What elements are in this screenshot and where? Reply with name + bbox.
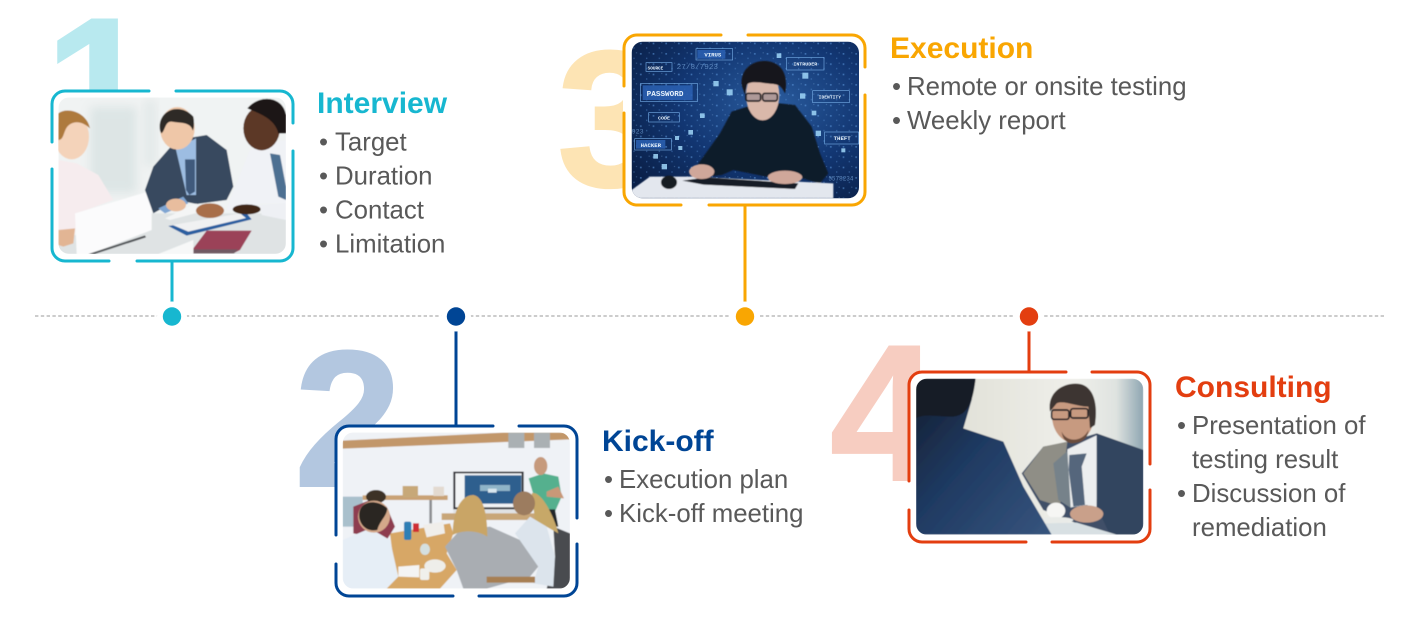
list: consulting: • [1177,412,1186,440]
photo: hacker at keyboard: IDENTITY [819,95,841,101]
photo: hacker at keyboard: VIRUS [704,52,722,59]
heading: kick-off: Kick-off [602,425,715,458]
list: consulting: • [1177,480,1186,508]
label: execution [890,32,1187,135]
step 4: consulting [830,302,1366,543]
list: interview: Duration [335,162,433,190]
list: interview: • [319,230,328,258]
heading: consulting: Consulting [1175,371,1332,404]
label: kick-off [602,425,803,528]
list: consulting: remediation [1192,514,1327,542]
label: interview [317,87,448,258]
step 2: kick-off [294,302,803,597]
photo: hacker at keyboard [632,42,859,198]
numeral 4: 4 [830,305,938,522]
photo: hacker at keyboard: PASSWORD [647,91,684,99]
list: consulting: testing result [1192,446,1338,474]
photo: hacker at keyboard: 27/8/7923 [677,64,718,72]
timeline axis [35,315,1385,317]
frame 1 [51,90,294,262]
photo: kick-off meeting room [343,432,570,589]
list: kick-off: Execution plan [619,466,788,494]
list: kick-off: Kick-off meeting [619,500,803,528]
timeline dot 2 [441,302,471,332]
frame 4 [908,371,1151,543]
photo: hacker at keyboard: THEFT [834,135,851,142]
heading: execution: Execution [890,32,1033,65]
list: interview: • [319,162,328,190]
timeline dot 4 [1014,302,1044,332]
list: execution: • [892,107,901,135]
label: consulting [1175,371,1366,542]
list: interview: Contact [335,196,424,224]
numeral 2: 2 [294,311,402,528]
photo: hacker at keyboard: 923 [632,127,644,135]
timeline dot 3 [730,302,760,332]
photo: consultant in discussion [916,379,1143,535]
step 1: interview [45,0,448,332]
connector 3 [744,205,746,303]
photo: hacker at keyboard: INTRUDER [793,62,817,68]
connector 4 [1028,330,1030,371]
list: execution: Weekly report [907,107,1066,135]
list: interview: Limitation [335,230,445,258]
timeline dot 1 [157,302,187,332]
list: consulting: Presentation of [1192,412,1366,440]
frame 2 [335,425,578,597]
list: interview: • [319,128,328,156]
list: execution: • [892,73,901,101]
photo: hacker at keyboard: 5578234 [828,176,854,183]
connector 2 [454,330,458,425]
photo: hacker at keyboard: CODE [658,116,670,122]
list: kick-off: • [604,466,613,494]
frame 3 [623,34,866,206]
photo: hacker at keyboard: HACKER [641,142,662,149]
step 3: execution [557,11,1187,332]
connector 1 [170,262,174,303]
list: execution: Remote or onsite testing [907,73,1187,101]
photo: business meeting [54,97,286,254]
heading: interview: Interview [317,87,448,120]
list: kick-off: • [604,500,613,528]
numeral 3: 3 [557,11,665,228]
photo: hacker at keyboard: SOURCE [648,66,664,71]
list: interview: • [319,196,328,224]
list: consulting: Discussion of [1192,480,1346,508]
list: interview: Target [335,128,407,156]
